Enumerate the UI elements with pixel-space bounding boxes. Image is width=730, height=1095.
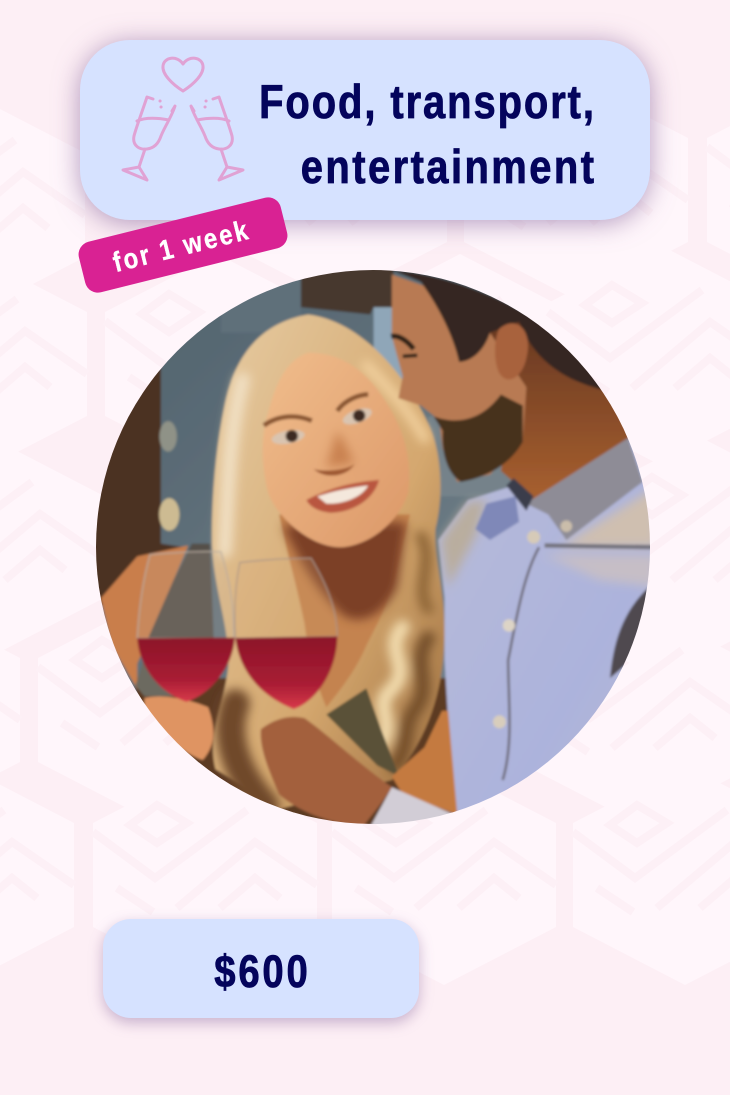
shirt shadow and placket [608, 587, 647, 678]
man ear [495, 323, 528, 379]
hair waves [225, 365, 428, 805]
woman near arm [392, 711, 457, 815]
window background [102, 270, 522, 694]
wine [137, 637, 235, 702]
header pill background [80, 40, 650, 220]
left hand [145, 697, 213, 760]
lips and smile [306, 480, 379, 513]
dark top pillar [300, 270, 395, 316]
tag: for 1 week [76, 195, 290, 295]
front hand [261, 717, 392, 827]
eyes [270, 429, 306, 446]
heading text [259, 77, 594, 194]
woman far arm [101, 545, 188, 689]
man face [392, 275, 526, 482]
woman hair [212, 315, 445, 809]
heading text: Food, transport, [259, 77, 594, 129]
man shirt [437, 438, 650, 812]
tag: for 1 week: for 1 week [109, 214, 251, 278]
wine glasses [137, 551, 234, 638]
bokeh lights [159, 498, 179, 531]
lower dark base under hair [134, 676, 454, 824]
man beard [434, 395, 523, 482]
heading text: entertainment [301, 142, 594, 194]
woman face [263, 353, 409, 547]
man cuff [369, 785, 453, 824]
woman neck and chest [279, 515, 410, 707]
nose shadow [314, 464, 355, 476]
man head backing and neck [488, 320, 628, 500]
shirt buttons [527, 531, 540, 544]
man collar [526, 438, 643, 540]
dark brown left pillar [96, 368, 181, 606]
icon: two champagne glasses with a heart [123, 58, 243, 180]
price panel [103, 919, 419, 1018]
man hair [392, 270, 606, 391]
eyebrows [264, 417, 312, 425]
man brow and eye [391, 336, 414, 349]
price text: $600 [214, 946, 308, 997]
photo: couple toasting with red wine [96, 270, 650, 824]
woman dress left [148, 544, 214, 638]
header panel [80, 40, 650, 220]
woman dress at chest [326, 688, 399, 776]
